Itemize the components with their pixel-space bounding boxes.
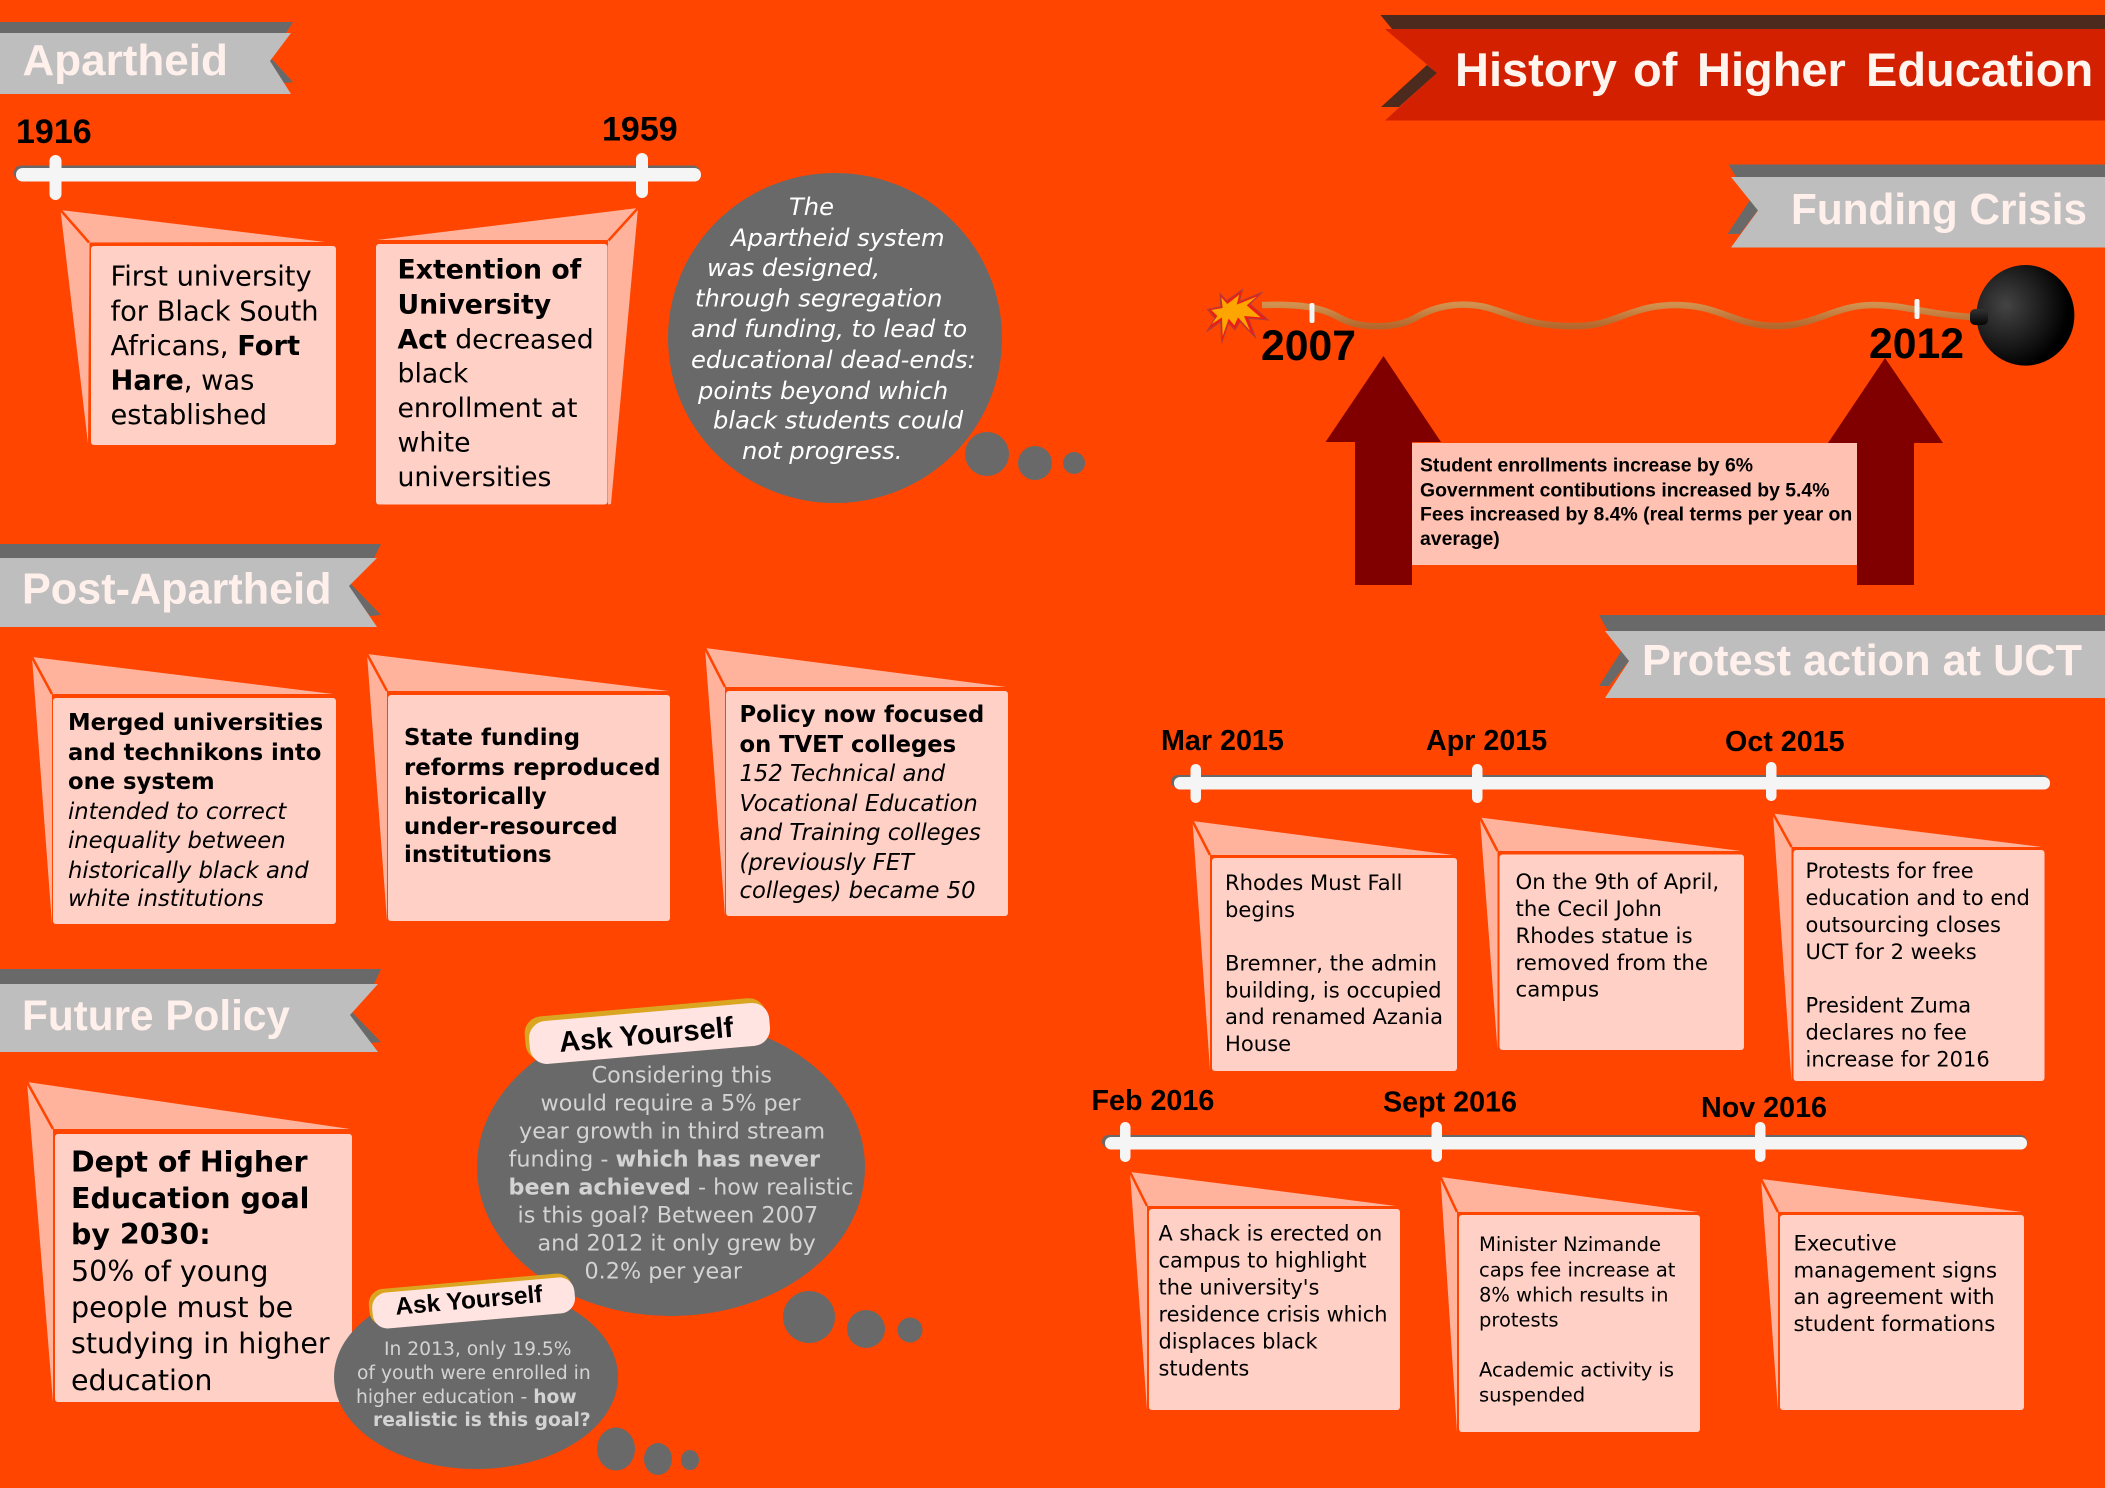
card text: studying in higher: [71, 1327, 330, 1360]
card text: established: [110, 400, 267, 431]
card text: white institutions: [68, 886, 264, 912]
bubble text: and 2012 it only grew by: [538, 1230, 816, 1256]
bubble text: 0.2% per year: [584, 1258, 743, 1284]
card text: UCT for 2 weeks: [1806, 940, 1977, 964]
date: Sept 2016: Sept 2016: [1383, 1086, 1517, 1118]
card text: people must be: [71, 1291, 293, 1324]
card text: 50% of young: [71, 1255, 268, 1288]
card text: universities: [398, 462, 551, 493]
card box: [1149, 1209, 1400, 1410]
bubble text: - how realistic: [691, 1174, 853, 1200]
card wedge: [377, 208, 638, 504]
year: 2007: 2007: [1261, 322, 1356, 370]
thought bubble: third stream funding: [477, 1018, 922, 1348]
bubble text: educational dead-ends:: [691, 346, 976, 374]
card text: Education goal: [71, 1182, 309, 1215]
bubble text: black students could: [713, 406, 964, 434]
card text: protests: [1479, 1308, 1559, 1332]
banner: Future Policy: [0, 969, 381, 1052]
card box: [1500, 854, 1744, 1050]
card text: State funding: [404, 725, 580, 751]
card text: for Black South: [110, 296, 319, 328]
card: shack on campus: [1130, 1172, 1400, 1410]
card box: [1794, 850, 2044, 1081]
date: Oct 2015: Oct 2015: [1725, 726, 1845, 758]
label text: Ask Yourself: [394, 1281, 544, 1321]
card text: the university's: [1158, 1276, 1319, 1300]
icon: bomb: [1970, 265, 2074, 366]
arrow: left: [1326, 356, 1441, 585]
card wedge: [60, 210, 325, 444]
main title: of: [1633, 43, 1678, 96]
card text: (previously FET: [740, 850, 916, 876]
card text: historically black and: [68, 858, 309, 884]
bubble text: which has never: [615, 1146, 820, 1172]
heading: Funding Crisis: Funding Crisis: [1791, 185, 2087, 234]
card text: increase for 2016: [1806, 1048, 1990, 1072]
card text: Bremner, the admin: [1225, 950, 1437, 976]
card text: enrollment at: [398, 393, 577, 424]
card text: residence crisis which: [1158, 1302, 1387, 1326]
bubble text: through segregation: [695, 284, 942, 312]
card text: and Training colleges: [740, 820, 981, 846]
card text: historically: [404, 784, 547, 810]
card: protests for free education: [1773, 814, 2044, 1081]
card text: decreased: [447, 324, 594, 356]
card text: campus: [1516, 978, 1599, 1002]
year: 2012: 2012: [1869, 320, 1964, 368]
card wedge: [1773, 814, 2042, 1081]
heading: Apartheid: Apartheid: [22, 36, 228, 85]
card text: and technikons into: [68, 740, 321, 766]
heading: Post-Apartheid: Post-Apartheid: [22, 566, 332, 614]
banner: Post-Apartheid: [0, 544, 381, 627]
card: executive agreement: [1761, 1179, 2024, 1410]
card text: reforms reproduced: [404, 755, 661, 781]
card: Extension of University Act: [376, 208, 638, 504]
label: Ask Yourself (small): [368, 1272, 576, 1330]
card text: the Cecil John: [1516, 897, 1662, 922]
card text: institutions: [404, 842, 552, 868]
year: 1959: 1959: [602, 110, 678, 148]
card text: education and to end: [1806, 886, 2030, 910]
bubble text: how: [533, 1387, 577, 1408]
card text: student formations: [1794, 1311, 1995, 1336]
card: state funding reforms: [367, 654, 670, 921]
bubble text: funding -: [508, 1146, 615, 1172]
label: Ask Yourself (large): [523, 997, 771, 1066]
card text: Executive: [1794, 1230, 1897, 1256]
bubble text: Apartheid system: [729, 224, 945, 252]
card text: outsourcing closes: [1806, 913, 2001, 937]
card text: Merged universities: [68, 710, 323, 736]
tick: 2012: [1914, 299, 1920, 319]
card text: Rhodes statue is: [1516, 924, 1693, 949]
card text: President Zuma: [1806, 994, 1971, 1018]
card text: on TVET colleges: [740, 732, 956, 758]
card box: [376, 244, 608, 504]
card wedge: [1192, 821, 1453, 1070]
card text: management signs: [1794, 1258, 1997, 1282]
bubble text: not progress.: [742, 437, 902, 465]
date: Nov 2016: Nov 2016: [1701, 1092, 1827, 1124]
statistics text: average): [1420, 528, 1500, 550]
fuse: [1262, 305, 1971, 326]
card box: [1780, 1215, 2024, 1410]
card box: [55, 1134, 352, 1402]
card: Rhodes Must Fall: [1192, 821, 1457, 1071]
card text: Hare: [110, 366, 184, 396]
card text: Act: [398, 324, 447, 356]
card: TVET colleges: [705, 648, 1008, 916]
card: fee cap: [1440, 1177, 1700, 1432]
banner: Apartheid: [0, 22, 293, 94]
card wedge: [1480, 818, 1741, 1050]
card text: First university: [110, 262, 312, 292]
date: Mar 2015: Mar 2015: [1161, 725, 1284, 757]
timeline: 1916 to 1959: [14, 110, 701, 200]
date: Apr 2015: Apr 2015: [1426, 725, 1547, 757]
card: Dept of Higher Education goal: [27, 1082, 352, 1402]
bubble text: year growth in third stream: [519, 1118, 825, 1144]
card text: On the 9th of April,: [1516, 870, 1719, 895]
card wedge: [32, 657, 333, 924]
card text: declares no fee: [1806, 1020, 1967, 1044]
bubble text: and funding, to lead to: [691, 315, 967, 343]
card text: under-resourced: [404, 814, 618, 840]
bubble text: been achieved: [508, 1174, 691, 1200]
banner: Funding Crisis: [1728, 164, 2105, 248]
statistics text: Student enrollments increase by 6%: [1420, 454, 1753, 476]
card text: inequality between: [68, 828, 286, 854]
card text: by 2030:: [71, 1218, 211, 1251]
bubble text: would require a 5% per: [540, 1090, 801, 1116]
card text: Vocational Education: [740, 791, 978, 817]
timeline: 2016: [1092, 1085, 2027, 1162]
card text: Africans, Fort: [110, 331, 300, 362]
card text: Dept of Higher: [71, 1146, 308, 1178]
bubble text: In 2013, only 19.5%: [384, 1339, 572, 1360]
card text: A shack is erected on: [1158, 1222, 1382, 1246]
bubble text: of youth were enrolled in: [357, 1363, 591, 1384]
card text: building, is occupied: [1225, 978, 1442, 1002]
banner: Protest action at UCT: [1599, 615, 2105, 698]
statistics text: Fees increased by 8.4% (real terms per year on: [1420, 504, 1852, 526]
card text: campus to highlight: [1158, 1248, 1367, 1272]
card text: Extention of: [398, 254, 582, 286]
card text: Protests for free: [1806, 859, 1974, 883]
card wedge: [1761, 1179, 2022, 1410]
card box: [91, 246, 336, 445]
card box: [1212, 858, 1457, 1071]
card text: one system: [68, 769, 215, 795]
card text: suspended: [1479, 1384, 1585, 1406]
card text: intended to correct: [68, 799, 287, 825]
year: 1916: 1916: [16, 113, 92, 151]
card text: education: [71, 1364, 212, 1397]
card text: caps fee increase at: [1479, 1258, 1676, 1282]
card wedge: [27, 1082, 350, 1402]
card box: [53, 698, 336, 924]
tick: 2007: [1310, 303, 1314, 323]
card text: removed from the: [1516, 951, 1708, 976]
card text: 8% which results in: [1479, 1284, 1668, 1306]
main title: History: [1455, 43, 1617, 96]
card text: Minister Nzimande: [1479, 1233, 1661, 1256]
main title: Education: [1866, 43, 2093, 96]
card text: Rhodes Must Fall: [1225, 870, 1402, 895]
card text: students: [1158, 1356, 1249, 1380]
main title: Higher: [1697, 43, 1846, 96]
card text: black: [398, 358, 469, 390]
card text: 152 Technical and: [740, 761, 946, 787]
panel: funding statistics: [1412, 443, 1857, 565]
title banner: [1380, 15, 2105, 120]
card text: white: [398, 428, 471, 458]
bubble text: realistic is this goal?: [373, 1410, 591, 1431]
heading: Protest action at UCT: Protest action at UCT: [1642, 636, 2082, 685]
card text: begins: [1225, 897, 1295, 922]
statistics text: Government contibutions increased by 5.4%: [1420, 480, 1829, 502]
card box: [1459, 1215, 1700, 1432]
card text: University: [398, 290, 551, 320]
date: Feb 2016: Feb 2016: [1092, 1085, 1214, 1117]
card: Fort Hare: [60, 210, 336, 445]
card text: , was: [184, 366, 254, 396]
card box: [726, 691, 1008, 916]
heading: Future Policy: Future Policy: [22, 992, 290, 1039]
bomb timeline: [1207, 265, 2074, 370]
card text: House: [1225, 1031, 1291, 1056]
arrow: right: [1828, 358, 1943, 585]
bubble text: is this goal? Between 2007: [518, 1202, 818, 1228]
bubble text: points beyond which: [697, 377, 948, 405]
card wedge: [367, 654, 669, 921]
bubble text: Considering this: [592, 1062, 772, 1088]
card: Rhodes statue removed: [1480, 818, 1744, 1050]
card text: Academic activity is: [1479, 1358, 1674, 1382]
card wedge: [1130, 1172, 1396, 1410]
icon: spark: [1207, 289, 1268, 343]
bubble text: The: [789, 193, 834, 221]
card wedge: [1440, 1177, 1698, 1432]
bubble text: higher education -: [356, 1387, 533, 1408]
bubble text: was designed,: [707, 254, 880, 282]
card text: and renamed Azania: [1225, 1004, 1443, 1029]
thought bubble: Apartheid system: [668, 173, 1085, 503]
card text: an agreement with: [1794, 1284, 1994, 1309]
card text: displaces black: [1158, 1330, 1319, 1354]
card box: [388, 695, 670, 921]
card text: colleges) became 50: [740, 878, 976, 904]
thought bubble: 19.5 percent enrolled: [334, 1285, 699, 1475]
label text: Ask Yourself: [558, 1012, 735, 1059]
timeline: 2015: [1161, 725, 2050, 803]
card text: Policy now focused: [740, 702, 984, 728]
card wedge: [705, 648, 1006, 916]
card: merged universities: [32, 657, 336, 924]
